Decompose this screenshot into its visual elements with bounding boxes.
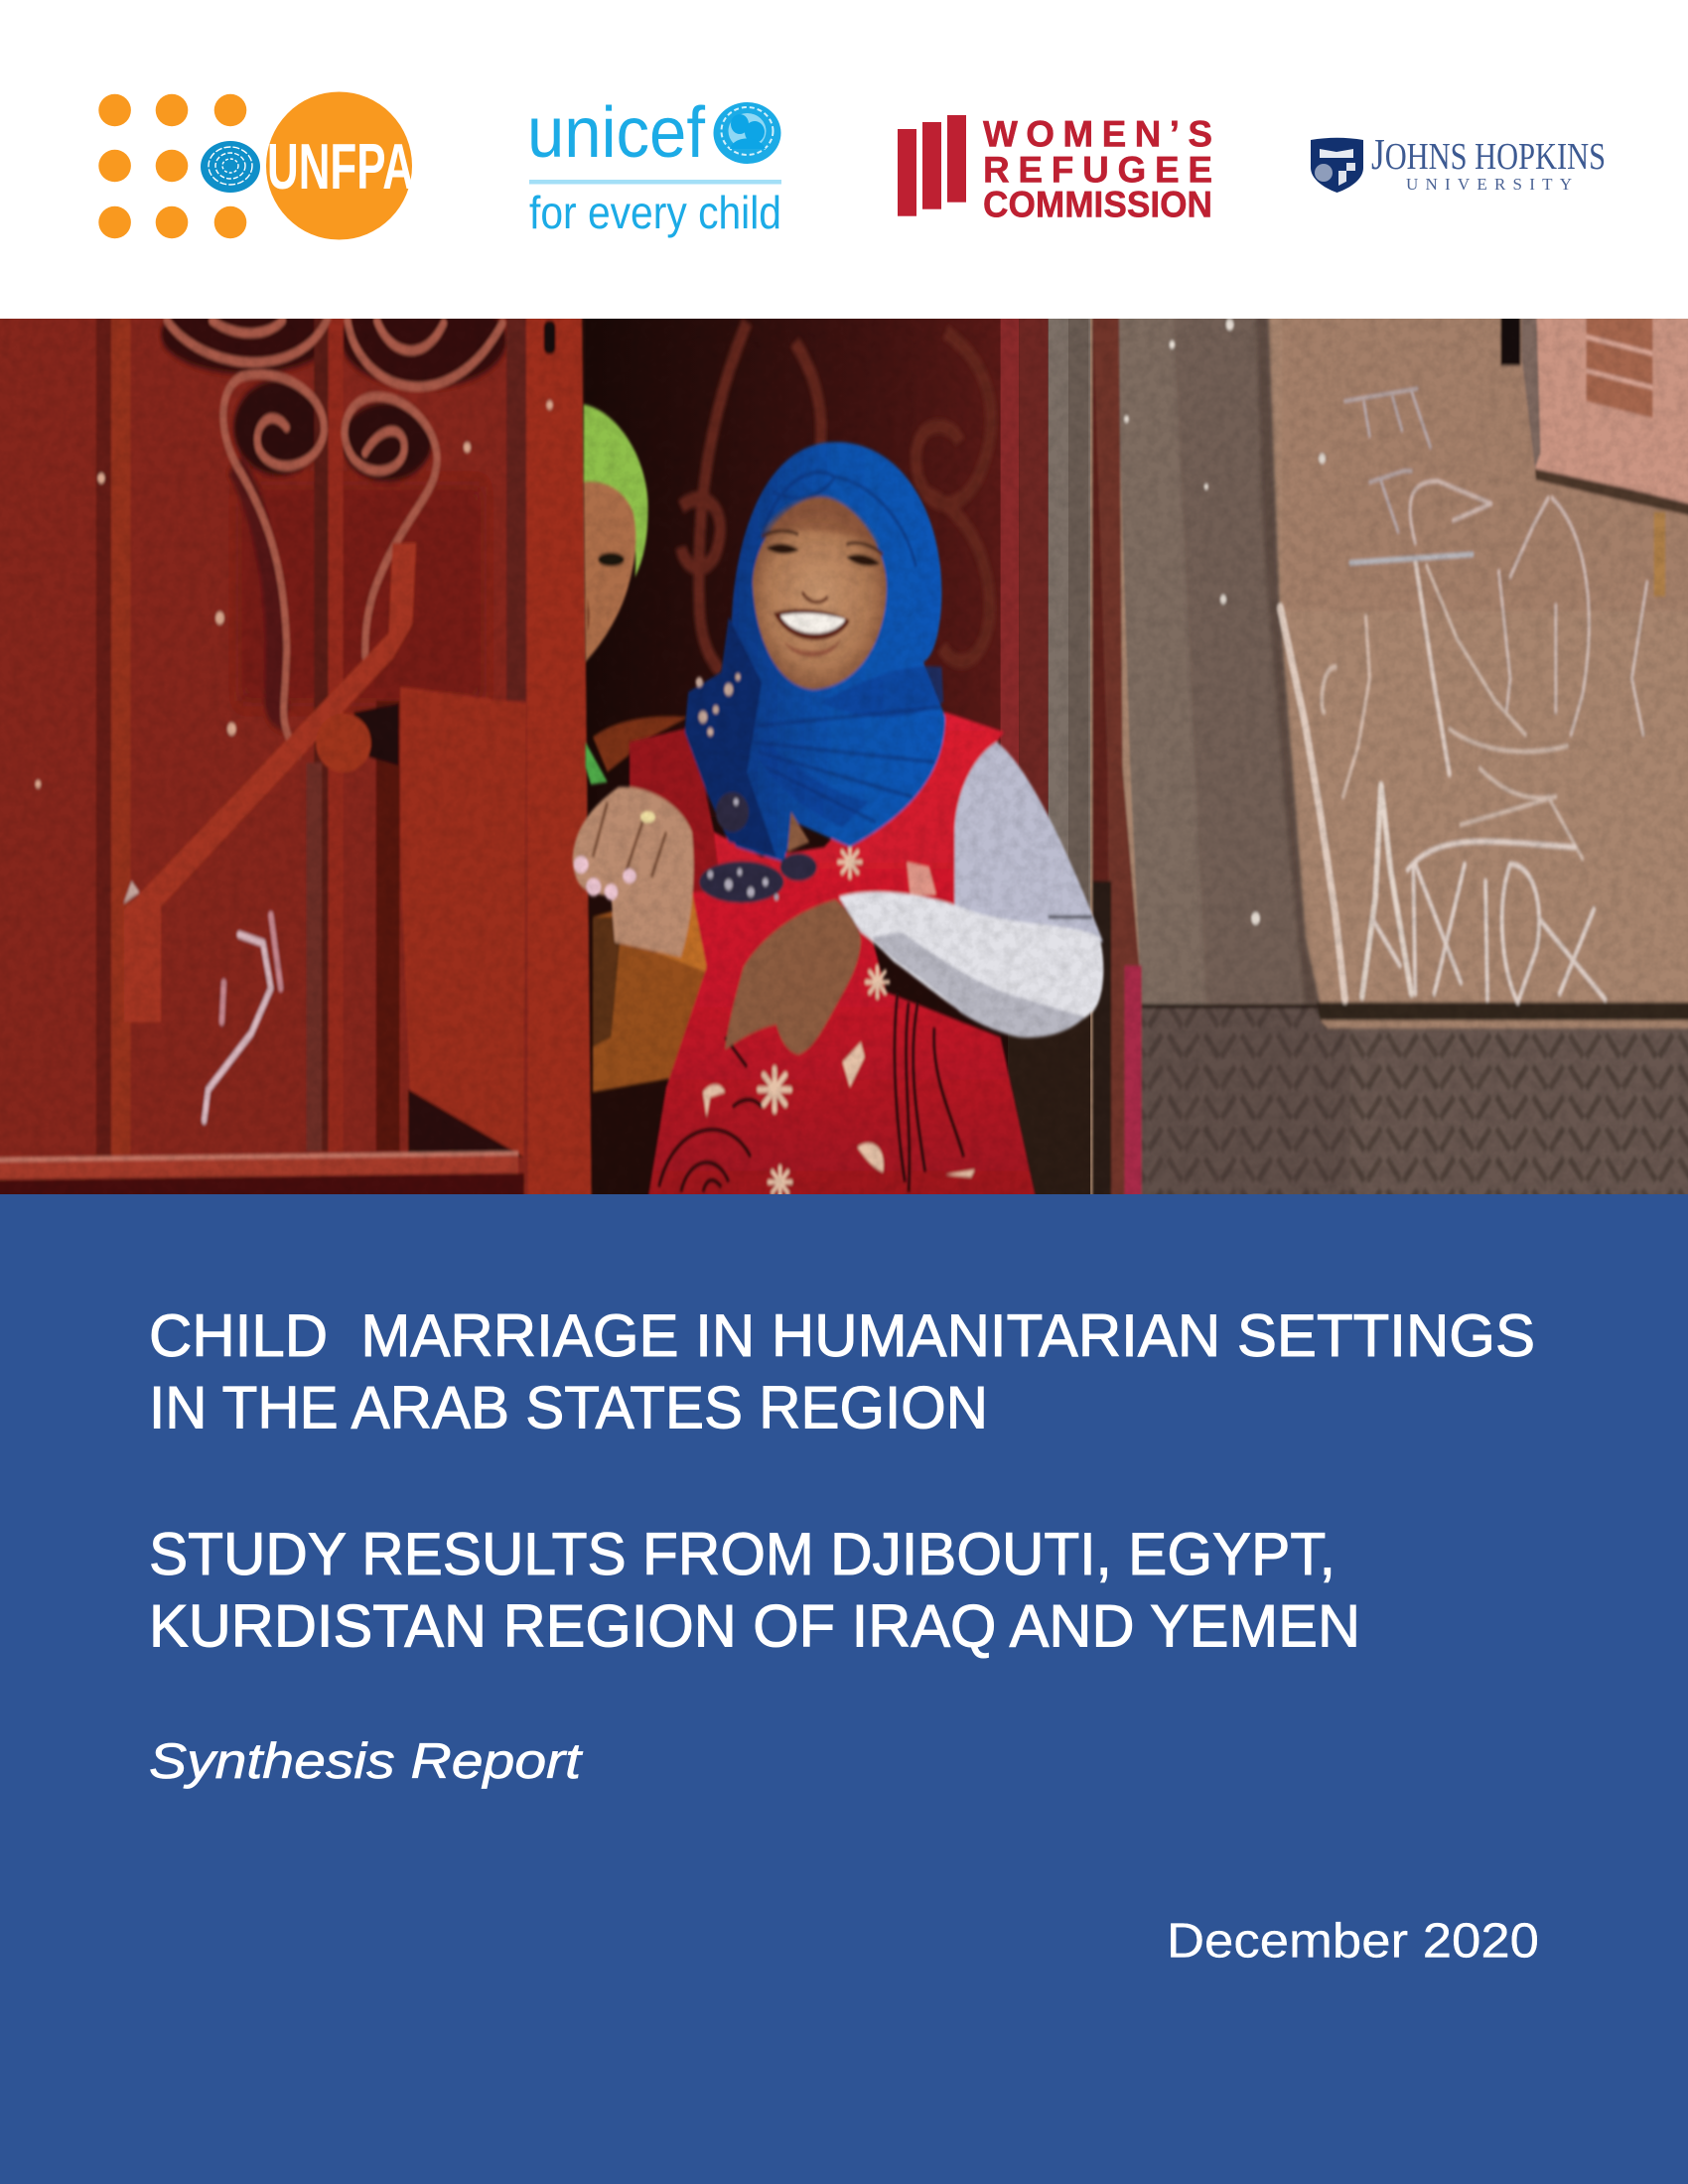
heading: report title <box>149 1302 1535 1440</box>
logo: Johns Hopkins University <box>1311 130 1606 194</box>
logo: Women's Refugee Commission: REFUGEE <box>983 149 1212 190</box>
child in green scarf behind the door <box>584 404 688 784</box>
grain overlay <box>0 319 1688 1195</box>
logo: Johns Hopkins University: UNIVERSITY <box>1406 175 1572 194</box>
right hand <box>725 899 861 1054</box>
subtitle: Synthesis Report: Synthesis Report <box>149 1733 583 1789</box>
interior and ironwork behind the woman <box>578 317 1090 1201</box>
panel: blue title block <box>0 1194 1688 2184</box>
stone wall with chalk graffiti <box>1088 295 1688 1225</box>
woman in blue headscarf and red dress <box>573 442 1103 1221</box>
headscarf <box>692 442 945 862</box>
heading: study scope <box>149 1521 1360 1659</box>
logo: Women's Refugee Commission: COMMISSION <box>983 184 1212 224</box>
face <box>753 497 887 690</box>
scarf knot embroidery <box>699 792 817 903</box>
logo: Women's Refugee Commission: WOMEN’S <box>983 113 1212 154</box>
logo: UNFPA <box>98 91 414 240</box>
orange sleeve <box>593 887 727 1092</box>
date: December 2020 <box>1167 1915 1539 1969</box>
heading: report title: CHILD MARRIAGE IN HUMANITARIAN SETTINGS <box>149 1302 1535 1369</box>
logo row <box>98 91 1606 240</box>
logo: unicef: for every child <box>529 187 781 238</box>
logo: unicef: unicef <box>527 93 706 173</box>
heading: report title: IN THE ARAB STATES REGION <box>149 1374 988 1440</box>
logo: Women's Refugee Commission <box>898 113 1212 224</box>
logo: UNFPA: UNFPA <box>267 130 414 203</box>
heading: study scope: STUDY RESULTS FROM DJIBOUTI, EGYPT, <box>149 1521 1336 1587</box>
red door with ironwork and bolt <box>0 292 592 1219</box>
photo: smiling woman in a red doorway <box>0 319 1688 1194</box>
grey sleeves <box>839 742 1103 1037</box>
logo: Johns Hopkins University: JOHNS HOPKINS <box>1371 130 1606 179</box>
logo: unicef <box>527 93 781 238</box>
heading: study scope: KURDISTAN REGION OF IRAQ AND YEMEN <box>149 1592 1360 1659</box>
left hand on door <box>573 787 694 957</box>
red dress <box>630 712 1041 1221</box>
